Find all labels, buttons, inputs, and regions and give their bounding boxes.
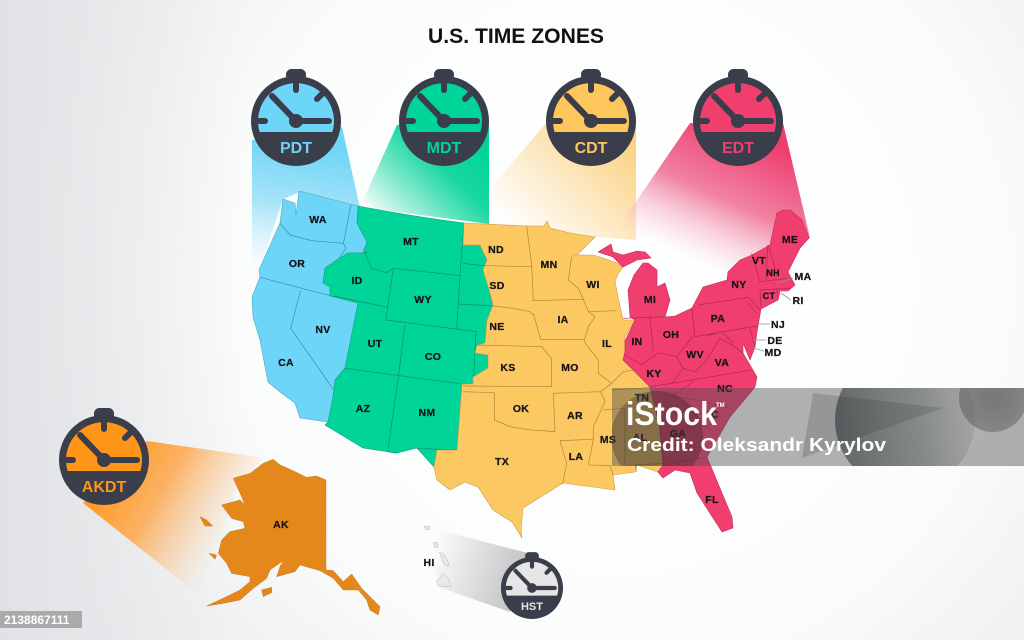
state labels: IN: [631, 336, 643, 348]
state labels: MO: [561, 362, 579, 374]
clock: HST: [501, 552, 563, 619]
state labels: TX: [495, 456, 509, 468]
state labels: ID: [351, 275, 363, 287]
state labels: WY: [414, 294, 432, 306]
state labels: MD: [765, 347, 782, 359]
state labels: NY: [731, 279, 747, 291]
state labels: ME: [782, 234, 798, 246]
beam: MDT: [360, 125, 489, 224]
state labels: WI: [586, 279, 600, 291]
state labels: CT: [763, 291, 775, 301]
state labels: OK: [513, 403, 529, 415]
state labels: OR: [289, 258, 305, 270]
state labels: DE: [767, 335, 783, 347]
beam: PDT: [252, 127, 360, 290]
beam: HST: [427, 527, 532, 612]
clock: EDT: [693, 69, 783, 166]
image id tag: 2138867111: [4, 613, 70, 627]
state labels: GA: [670, 428, 686, 440]
clock: CDT: CDT: [575, 140, 608, 157]
state labels: VA: [715, 357, 729, 369]
clock: PDT: PDT: [280, 140, 312, 157]
clock: AKDT: [59, 408, 149, 505]
zone: Eastern states: [598, 210, 809, 532]
beam: AKDT: [83, 441, 265, 596]
state labels: HI: [423, 557, 435, 569]
zone: Mountain states: [323, 206, 493, 467]
state labels: NJ: [771, 319, 785, 331]
watermark text: trademark: TM: [716, 403, 725, 409]
state labels: MS: [600, 434, 616, 446]
state labels: AZ: [356, 403, 371, 415]
state labels: WV: [686, 349, 704, 361]
state labels: AK: [273, 519, 289, 531]
clock: AKDT: AKDT: [82, 479, 126, 496]
state labels: MT: [403, 236, 419, 248]
state labels: AL: [633, 432, 648, 444]
state labels: WA: [309, 214, 327, 226]
clock: PDT: [251, 69, 341, 166]
state labels: KS: [500, 362, 516, 374]
clock: MDT: MDT: [427, 140, 462, 157]
state labels: NH: [766, 268, 780, 278]
clock: HST: HST: [521, 601, 543, 613]
state labels: VT: [752, 255, 766, 267]
state labels: NM: [419, 407, 435, 419]
beam: EDT: [607, 123, 810, 300]
state labels: MN: [541, 259, 557, 271]
state labels: PA: [711, 313, 725, 325]
state labels: SD: [489, 280, 505, 292]
map: Hawaii: [424, 526, 451, 587]
state labels: IA: [557, 314, 569, 326]
clock: MDT: [399, 69, 489, 166]
image id tag: [0, 611, 82, 628]
map: Alaska: [200, 459, 380, 615]
state labels: OH: [663, 329, 679, 341]
map: contiguous United States: [252, 191, 809, 538]
zone: Central states: [434, 221, 667, 538]
state labels: IL: [602, 338, 612, 350]
clock: EDT: EDT: [722, 140, 754, 157]
watermark text: iStock: iStock: [626, 395, 718, 432]
state labels: MA: [795, 271, 812, 283]
watermark band: [612, 388, 1024, 466]
state labels: KY: [646, 368, 662, 380]
beam: CDT: [490, 123, 636, 240]
clock: CDT: [546, 69, 636, 166]
zone: Pacific states: [252, 191, 367, 422]
state labels: TN: [635, 392, 649, 404]
state labels: NE: [489, 321, 505, 333]
title: U.S. TIME ZONES: [428, 25, 604, 48]
state labels: NV: [315, 324, 331, 336]
state labels: LA: [569, 451, 583, 463]
state labels: ND: [488, 244, 504, 256]
leader lines for small northeastern states: [753, 278, 793, 351]
state labels: MI: [644, 294, 656, 306]
state labels: CA: [278, 357, 294, 369]
state labels: SC: [703, 409, 719, 421]
state labels: FL: [705, 494, 719, 506]
state labels: NC: [717, 383, 733, 395]
state labels: RI: [792, 295, 804, 307]
state labels: UT: [368, 338, 383, 350]
state labels: [273, 214, 812, 569]
state labels: CO: [425, 351, 441, 363]
state labels: AR: [567, 410, 583, 422]
watermark text: credit: Credit: Oleksandr Kyrylov: [627, 435, 886, 455]
